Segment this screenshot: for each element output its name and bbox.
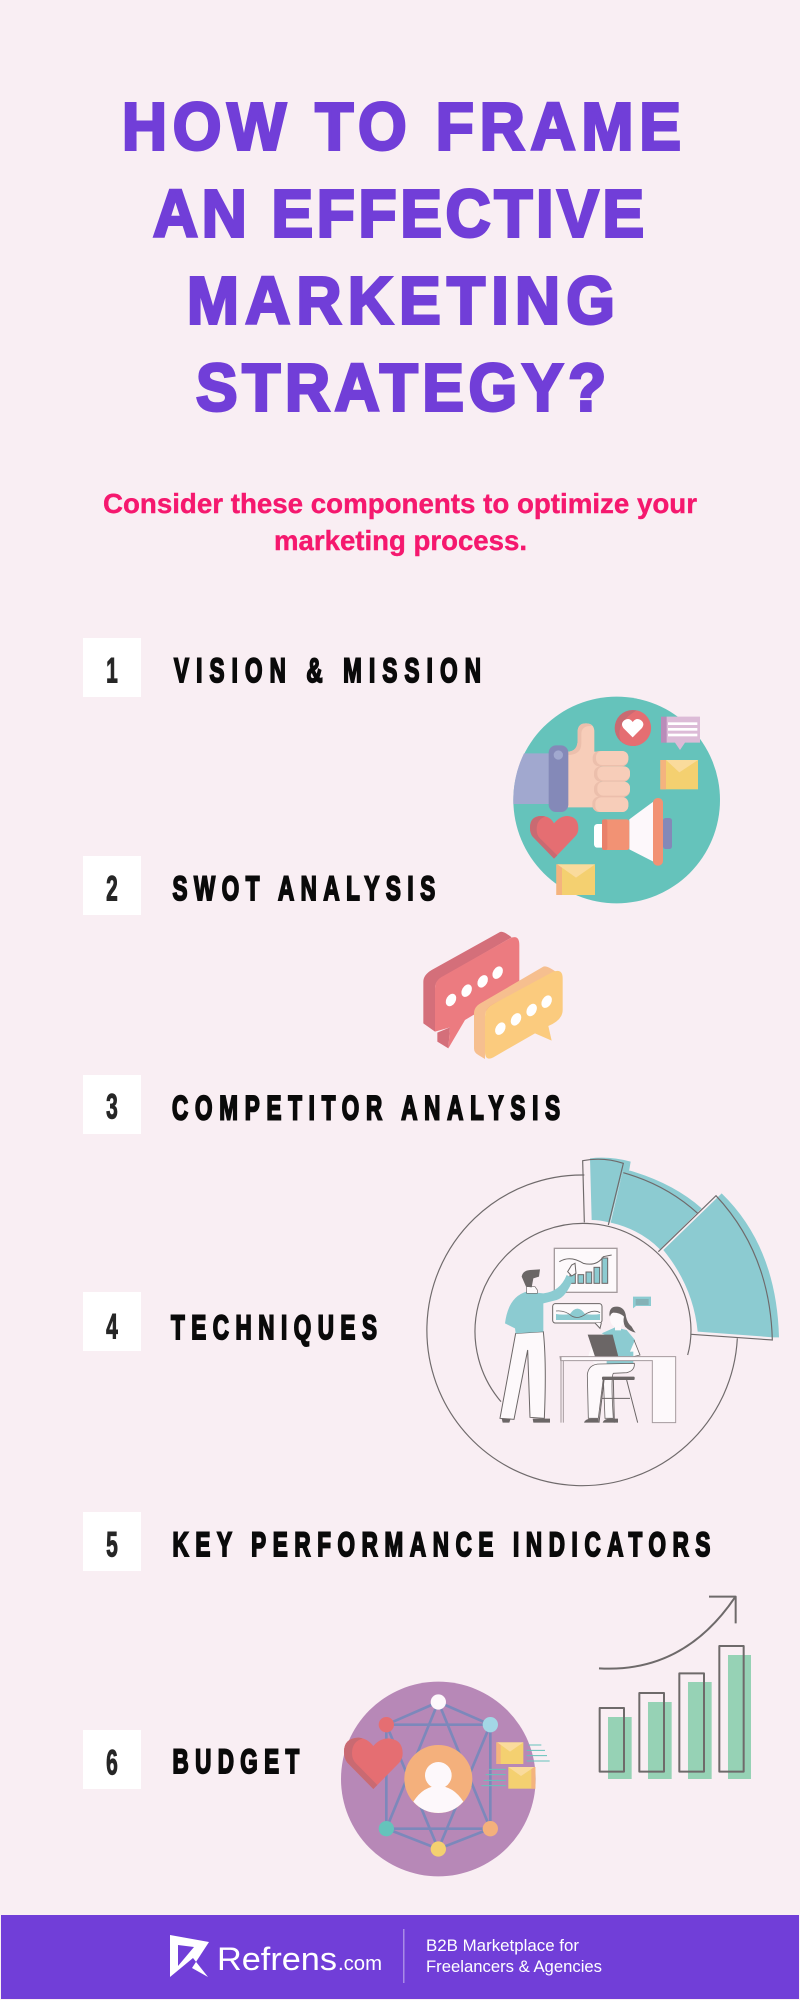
- step 6: budget: BUDGET: [172, 1743, 300, 1781]
- step 3: competitor analysis: COMPETITOR ANALYSIS: [172, 1090, 560, 1128]
- step 6: budget: [83, 1730, 300, 1789]
- step 4: techniques: [83, 1292, 377, 1351]
- title: HOW TO FRAME: [122, 88, 681, 164]
- icon: network with profile and heart: [341, 1682, 550, 1876]
- footer tagline: B2B Marketplace for: [426, 1936, 579, 1955]
- logo domain: .com: [338, 1953, 382, 1975]
- icon: social media thumbs up: [513, 697, 720, 903]
- icon: team reviewing charts in radial diagram: [427, 1158, 779, 1486]
- title: MARKETING: [187, 262, 615, 338]
- title: STRATEGY?: [196, 349, 606, 425]
- subtitle: [103, 488, 697, 556]
- icon: refrens logo: [170, 1935, 209, 1977]
- step 6: budget: 6: [106, 1744, 118, 1783]
- footer tagline: Freelancers & Agencies: [426, 1957, 602, 1976]
- step 1: vision and mission: [83, 638, 481, 697]
- step 4: techniques: TECHNIQUES: [171, 1309, 377, 1347]
- icon: growth bar chart with arrow: [599, 1597, 751, 1779]
- step 1: vision and mission: VISION & MISSION: [174, 652, 481, 690]
- step 3: competitor analysis: [83, 1075, 560, 1134]
- footer tagline: [426, 1936, 602, 1976]
- title: [122, 88, 681, 425]
- footer band: [1, 1915, 799, 1999]
- step 2: swot analysis: [83, 856, 435, 915]
- step 3: competitor analysis: 3: [106, 1088, 118, 1127]
- step 2: swot analysis: SWOT ANALYSIS: [172, 870, 435, 908]
- step 2: swot analysis: 2: [106, 870, 118, 909]
- icon: chat bubbles: [423, 932, 563, 1059]
- step 5: key performance indicators: KEY PERFORMANCE INDICATORS: [172, 1526, 710, 1564]
- step 5: key performance indicators: 5: [106, 1526, 118, 1565]
- logo wordmark: Refrens: [217, 1941, 337, 1977]
- step 1: vision and mission: 1: [106, 652, 118, 691]
- step 4: techniques: 4: [106, 1308, 118, 1347]
- subtitle: Consider these components to optimize your: [103, 488, 697, 519]
- step 5: key performance indicators: [83, 1512, 710, 1571]
- subtitle: marketing process.: [274, 525, 527, 556]
- title: AN EFFECTIVE: [153, 175, 644, 251]
